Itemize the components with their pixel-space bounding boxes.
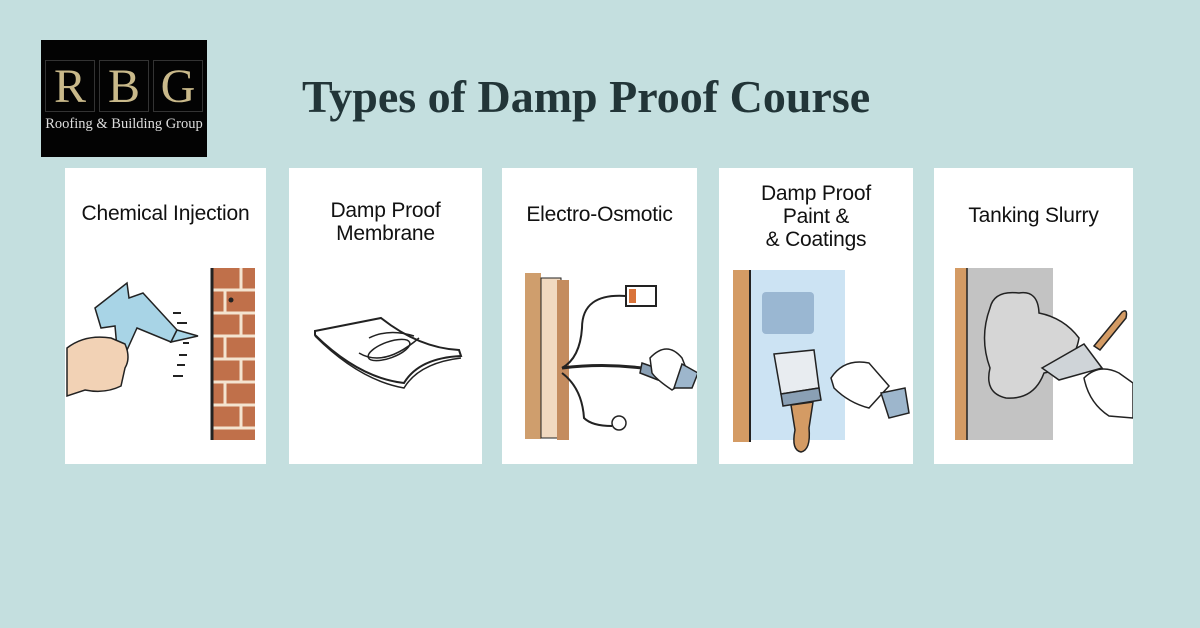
icon: paint brush on wall (733, 270, 910, 453)
logo letters (45, 60, 203, 113)
heading (330, 199, 441, 245)
icon: trowel spreading slurry (955, 268, 1133, 440)
icon: wall with wires, battery, hand (525, 273, 697, 440)
heading: Damp Proof (761, 182, 871, 205)
logo letters: R (54, 60, 86, 113)
heading: Paint & (783, 205, 849, 228)
panel: electro-osmotic (502, 168, 697, 464)
panel: chemical injection (65, 168, 266, 464)
heading: Electro-Osmotic (526, 203, 673, 226)
heading: Chemical Injection (82, 202, 249, 225)
logo letters: G (161, 60, 195, 113)
title: Types of Damp Proof Course (302, 71, 870, 122)
logo (41, 40, 207, 157)
heading: Membrane (336, 222, 435, 245)
panel: tanking slurry (934, 168, 1133, 464)
icon: injection gun and brick wall (66, 268, 255, 440)
panel: damp proof membrane (289, 168, 482, 464)
heading (761, 182, 872, 251)
logo letters: B (108, 60, 140, 113)
heading: & Coatings (766, 228, 866, 251)
logo tagline: Roofing & Building Group (45, 116, 203, 132)
heading: Tanking Slurry (968, 204, 1099, 227)
heading: Damp Proof (330, 199, 441, 222)
icon: membrane sheet (314, 316, 462, 389)
panel: damp proof paint & coatings (719, 168, 913, 464)
